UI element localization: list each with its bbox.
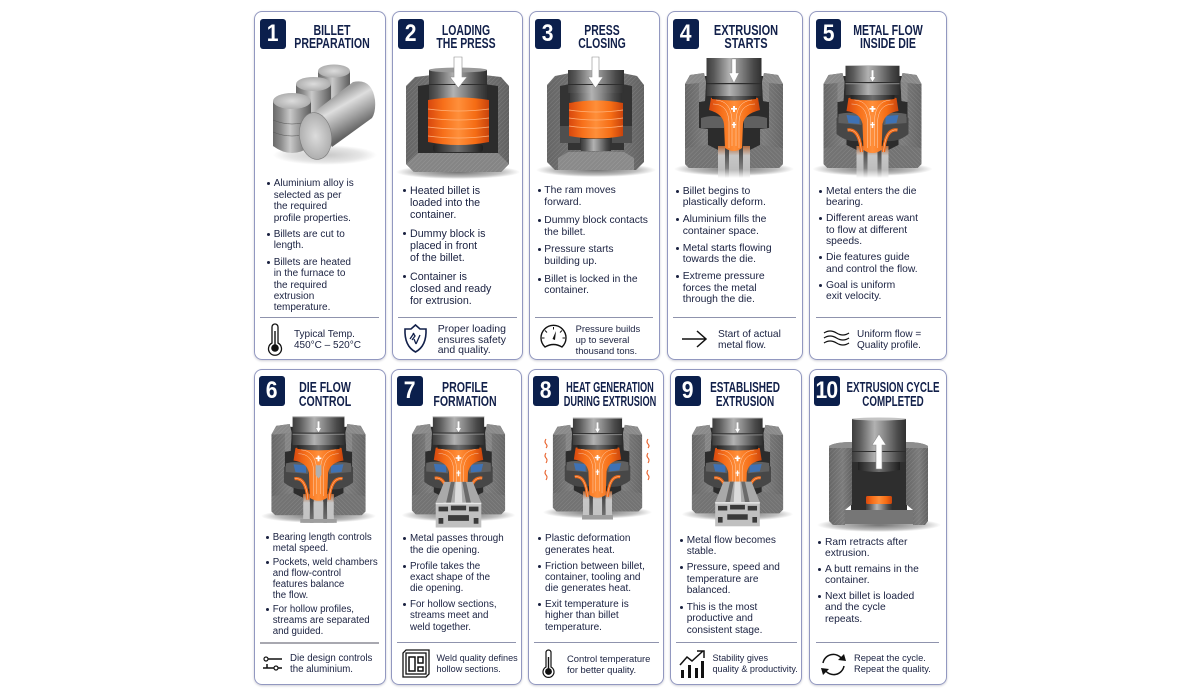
panel: step 4 extrusion starts — [667, 11, 803, 360]
bullet list — [267, 178, 354, 313]
bullet list: weld together. — [410, 622, 471, 633]
arrow: ram direction — [450, 57, 467, 88]
illustration: aluminium billets — [273, 64, 376, 164]
bullet list — [819, 186, 918, 302]
illustration: die flow control — [263, 416, 374, 523]
bullet list: extrusion. — [825, 548, 870, 559]
panel: step 8 heat generation — [528, 369, 664, 685]
bullet list: Pockets, weld chambers — [273, 557, 378, 568]
bullet list: For hollow profiles, — [273, 604, 354, 615]
footer note — [294, 328, 361, 350]
footer note: Die design controls — [290, 653, 372, 664]
heading: PREPARATION — [294, 36, 370, 52]
panel: step 7 profile formation — [391, 369, 522, 685]
bullet list: features balance — [273, 579, 344, 590]
footer note: Quality profile. — [857, 340, 921, 350]
bullet list: temperature. — [274, 302, 330, 313]
arrow: ram direction — [729, 59, 739, 83]
heading — [433, 380, 497, 410]
heading — [704, 382, 786, 409]
bullet list: Extreme pressure — [683, 271, 765, 282]
bullet list: streams meet and — [410, 610, 488, 621]
metal flow — [709, 96, 760, 151]
step number badge: 3 — [542, 20, 554, 47]
bullet list: Plastic deformation — [545, 533, 630, 544]
footer note — [718, 328, 781, 350]
icon: rising chart — [679, 650, 706, 678]
footer note: Proper loading — [438, 323, 506, 335]
bullet list: Exit temperature is — [545, 599, 629, 610]
bullet list: higher than billet — [545, 610, 619, 621]
bullet list: profile properties. — [274, 213, 351, 224]
footer note: quality & productivity. — [712, 664, 798, 674]
bullet list: forward. — [544, 197, 582, 208]
step number badge — [259, 376, 285, 406]
heading — [854, 22, 923, 52]
step number badge: 7 — [404, 377, 416, 404]
bullet list: Bearing length controls — [273, 532, 372, 542]
heading: LOADING — [442, 22, 490, 38]
heading: BILLET — [313, 22, 351, 38]
step number badge — [260, 19, 286, 49]
bullet list: and control the flow. — [826, 264, 918, 274]
bullet list: in the furnace to — [274, 268, 345, 279]
bullet list: towards the die. — [683, 254, 756, 265]
footer note: Weld quality defines — [436, 653, 518, 663]
bullet list: die generates heat. — [545, 583, 631, 594]
footer note: Stability gives — [712, 653, 768, 663]
bullet list: loaded into the — [410, 197, 480, 209]
footer note: thousand tons. — [576, 345, 637, 356]
bullet list: stable. — [687, 546, 716, 557]
heading: EXTRUSION — [714, 22, 778, 38]
bullet list: the required — [274, 280, 327, 291]
illustration: heat generation — [544, 418, 650, 520]
footer note: 450°C – 520°C — [294, 340, 361, 350]
heading: CLOSING — [578, 36, 625, 52]
bullet list: Die features guide — [826, 252, 910, 263]
bullet list — [538, 533, 645, 633]
footer note: Repeat the quality. — [854, 664, 931, 674]
icon: die connectors — [263, 656, 282, 671]
bullet list: Next billet is loaded — [825, 591, 914, 602]
bullet list: Different areas want — [826, 213, 918, 224]
footer note: Start of actual — [718, 328, 781, 340]
footer note: the aluminium. — [290, 664, 353, 675]
bullet list: consistent stage. — [687, 625, 762, 636]
bullet list: the flow. — [273, 590, 308, 601]
bullet list: and the cycle — [825, 602, 886, 613]
bullet list: Ram retracts after — [825, 537, 907, 548]
bullet list: container. — [544, 285, 589, 296]
bullet list: Container is — [410, 271, 467, 283]
heading: HEAT GENERATION — [566, 380, 654, 396]
bullet list: extrusion — [274, 291, 314, 302]
bullet list: container, tooling and — [545, 572, 641, 583]
step number badge: 6 — [266, 377, 278, 404]
step number badge — [816, 19, 841, 49]
heading — [578, 22, 626, 52]
bullet list: Metal starts flowing — [683, 243, 772, 254]
ram — [706, 58, 762, 100]
panel: step 2 loading the press — [392, 11, 523, 360]
bullet list: metal speed. — [273, 542, 328, 554]
heading: STARTS — [725, 36, 768, 52]
footer note: and quality. — [438, 344, 491, 356]
bullet list: closed and ready — [410, 283, 491, 295]
bullet list: This is the most — [687, 602, 757, 613]
footer note — [576, 323, 640, 356]
step number badge — [533, 376, 559, 406]
bullet list: generates heat. — [545, 545, 615, 556]
illustration: profile formation — [404, 416, 513, 528]
bullet list: A butt remains in the — [825, 564, 919, 575]
bullet list: repeats. — [825, 614, 862, 625]
bullet list: Heated billet is — [410, 185, 480, 197]
bullet list: Aluminium alloy is — [274, 178, 354, 189]
bullet list — [825, 537, 919, 625]
heated billet — [569, 100, 623, 138]
bullet list: Metal enters the die — [826, 186, 916, 196]
ram — [429, 68, 487, 100]
footer note — [857, 328, 921, 350]
step number badge — [673, 19, 699, 49]
bullet list: the die opening. — [410, 545, 480, 556]
illustration: billet loaded into press — [398, 56, 518, 178]
heading — [436, 22, 496, 52]
icon: cycle arrows — [820, 652, 847, 677]
heading: PRESS — [584, 22, 619, 38]
bullet list: plastically deform. — [683, 197, 766, 208]
panel: step 1 billet preparation — [254, 11, 386, 360]
heading — [299, 380, 351, 410]
step number badge: 10 — [816, 376, 838, 404]
bullet list: Profile takes the — [410, 561, 480, 572]
bullet list: Friction between billet, — [545, 561, 645, 572]
heading: PROFILE — [442, 380, 488, 396]
icon: thermometer — [268, 323, 282, 356]
bullet list — [676, 186, 772, 305]
bullet list — [403, 533, 504, 633]
footer note: Typical Temp. — [294, 328, 355, 340]
footer note: Repeat the cycle. — [854, 653, 926, 663]
footer note: metal flow. — [718, 340, 766, 350]
footer note: hollow sections. — [436, 664, 501, 674]
bullet list — [266, 532, 378, 637]
heading — [564, 380, 656, 410]
arrow: ram retracting — [872, 434, 886, 469]
panel: step 9 established extrusion — [670, 369, 802, 685]
bullet list — [687, 534, 780, 636]
illustration: press closing — [538, 56, 654, 176]
bullet list: the required — [274, 201, 327, 212]
footer note: Uniform flow = — [857, 328, 921, 340]
bullet list: Goal is uniform — [826, 280, 895, 290]
bullet list: Pressure starts — [544, 244, 614, 255]
bullet list: selected as per — [274, 190, 342, 201]
footer note — [567, 653, 650, 675]
heading: INSIDE DIE — [860, 36, 916, 52]
footer note — [854, 653, 931, 675]
footer note: for better quality. — [567, 664, 636, 675]
heading — [839, 382, 947, 409]
bullet list: for extrusion. — [410, 295, 472, 307]
bullet list: through the die. — [683, 294, 755, 305]
step number badge — [675, 376, 700, 406]
bullet list: placed in front — [410, 240, 477, 252]
bullet list: the billet. — [544, 227, 586, 238]
panel: step 10 extrusion cycle completed — [809, 369, 947, 685]
heading: METAL FLOW — [854, 22, 923, 38]
icon: pressure gauge — [540, 324, 567, 348]
heading — [714, 22, 778, 52]
step number badge: 5 — [823, 20, 834, 47]
bullet list: Billets are heated — [274, 257, 351, 268]
bullet list: Metal flow becomes — [687, 534, 776, 546]
bullet list: exit velocity. — [826, 291, 881, 302]
bullet list: Dummy block is — [410, 228, 485, 240]
bullet list: die opening. — [410, 583, 463, 594]
heading: CONTROL — [299, 394, 351, 410]
bullet list: Billet is locked in the — [544, 274, 638, 285]
illustration: extrusion starts — [676, 58, 792, 178]
heading: THE PRESS — [436, 36, 495, 52]
bullet list: Dummy block contacts — [544, 215, 648, 226]
heading: FORMATION — [433, 394, 497, 410]
footer note: Control temperature — [567, 653, 650, 664]
bullet list: length. — [274, 240, 304, 251]
heated billet — [428, 98, 489, 145]
bullet list: and guided. — [273, 626, 323, 637]
bullet list: Pressure, speed and — [687, 562, 780, 573]
bullet list: container. — [410, 209, 456, 221]
step number badge: 2 — [405, 20, 417, 47]
heading: ESTABLISHED — [710, 380, 780, 396]
step number badge — [397, 376, 422, 406]
bullet list: For hollow sections, — [410, 599, 497, 610]
illustration: ram retracted with butt — [809, 412, 947, 535]
step number badge: 1 — [267, 20, 279, 47]
icon: hollow section box — [402, 649, 430, 678]
panel: step 6 die flow control — [254, 369, 386, 685]
bullet list: Billet begins to — [683, 186, 750, 196]
bullet list: Billets are cut to — [274, 229, 345, 240]
bullet list: Aluminium fills the — [683, 214, 766, 225]
ram — [852, 418, 906, 472]
bullet list: container. — [825, 575, 870, 586]
bullet list: temperature are — [687, 574, 759, 585]
bullet list: Metal passes through — [410, 533, 504, 544]
icon: thermometer — [542, 649, 555, 678]
step number badge — [398, 19, 424, 49]
illustration: established extrusion — [670, 412, 802, 535]
heading: DURING EXTRUSION — [564, 394, 656, 410]
footer note: ensures safety — [438, 334, 506, 346]
icon: arrow right — [682, 330, 707, 348]
icon: waves — [824, 330, 850, 346]
step number badge: 4 — [680, 20, 692, 47]
illustration: metal flow inside die — [815, 65, 930, 178]
arrow: ram direction — [588, 57, 603, 88]
heading: DIE FLOW — [299, 380, 351, 396]
footer note — [438, 323, 506, 356]
aluminium butt — [866, 496, 892, 510]
heading: EXTRUSION — [716, 394, 774, 410]
bullet list: exact shape of the — [410, 572, 490, 583]
heading: EXTRUSION CYCLE — [846, 380, 939, 396]
icon: shield — [404, 324, 427, 353]
step number badge: 9 — [682, 377, 694, 404]
ram — [568, 70, 624, 102]
bullet list: container space. — [683, 226, 759, 237]
bullet list: productive and — [687, 613, 753, 624]
bullet list: speeds. — [826, 236, 862, 247]
footer note: up to several — [576, 334, 629, 345]
bullet list: and flow-control — [273, 568, 341, 579]
bullet list: streams are separated — [273, 615, 370, 626]
bullet list: balanced. — [687, 585, 730, 596]
step number badge — [535, 19, 560, 49]
footer note — [290, 653, 372, 675]
heat waves — [545, 439, 649, 480]
bullet list: bearing. — [826, 197, 863, 208]
bullet list: building up. — [544, 256, 597, 267]
panel: step 5 metal flow inside die — [809, 11, 947, 360]
bullet list: forces the metal — [683, 283, 757, 294]
bullet list — [403, 185, 492, 307]
bullet list: to flow at different — [826, 224, 907, 236]
footer note — [436, 653, 518, 674]
footer note — [712, 653, 798, 675]
bullet list: The ram moves — [544, 185, 616, 196]
footer note: Pressure builds — [576, 323, 640, 334]
heading — [294, 22, 370, 52]
bullet list: temperature. — [545, 622, 602, 633]
panel: step 3 press closing — [529, 11, 660, 360]
step number badge: 8 — [540, 377, 552, 404]
heading: COMPLETED — [862, 394, 924, 410]
bullet list: of the billet. — [410, 252, 465, 264]
bullet list — [538, 185, 648, 296]
